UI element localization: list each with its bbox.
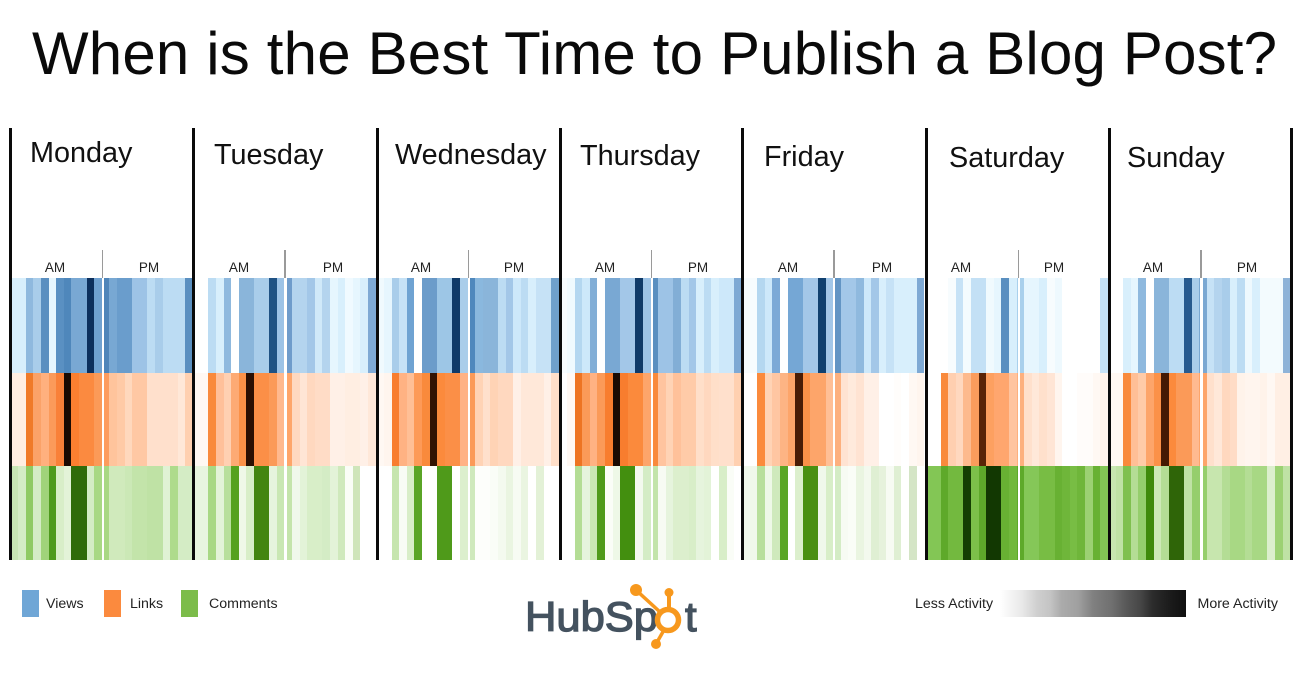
day label: Wednesday: Wednesday bbox=[395, 139, 547, 171]
PM label: PM bbox=[1044, 260, 1064, 275]
PM label: PM bbox=[1237, 260, 1257, 275]
Saturday comments band bbox=[928, 466, 1108, 560]
AM/PM divider bbox=[1018, 250, 1019, 278]
views label: Views bbox=[46, 596, 84, 612]
AM/PM divider bbox=[284, 250, 286, 278]
views swatch bbox=[22, 590, 39, 617]
AM/PM divider bbox=[468, 250, 469, 278]
Wednesday comments band bbox=[392, 466, 544, 560]
logo: HubSpot: HubSp bbox=[525, 593, 658, 640]
panel: Thursday bbox=[567, 140, 741, 560]
Monday links band bbox=[12, 373, 192, 466]
AM/PM divider bbox=[833, 250, 835, 278]
legend: activity scale bbox=[915, 590, 1278, 617]
Tuesday links band bbox=[195, 373, 376, 466]
logo: HubSpot: t bbox=[685, 593, 697, 640]
AM label: AM bbox=[229, 260, 249, 275]
panel: Sunday bbox=[1111, 142, 1290, 560]
Sunday links band bbox=[1111, 373, 1290, 466]
Monday views band bbox=[12, 278, 192, 373]
Sunday views band bbox=[1123, 278, 1290, 373]
AM label: AM bbox=[595, 260, 615, 275]
AM label: AM bbox=[951, 260, 971, 275]
title: When is the Best Time to Publish a Blog Post? bbox=[32, 20, 1277, 87]
comments swatch bbox=[181, 590, 198, 617]
day label: Sunday: Sunday bbox=[1127, 142, 1225, 174]
PM label: PM bbox=[504, 260, 524, 275]
Wednesday links band bbox=[379, 373, 559, 466]
Thursday links band bbox=[567, 373, 741, 466]
less activity label: Less Activity bbox=[915, 596, 993, 612]
Sunday comments band bbox=[1111, 466, 1290, 560]
Thursday comments band bbox=[575, 466, 727, 560]
AM/PM divider bbox=[651, 250, 652, 278]
day label: Monday: Monday bbox=[30, 137, 132, 169]
Wednesday views band bbox=[379, 278, 559, 373]
PM label: PM bbox=[139, 260, 159, 275]
Saturday links band bbox=[941, 373, 1108, 466]
Thursday views band bbox=[567, 278, 741, 373]
day label: Friday: Friday bbox=[764, 141, 844, 173]
PM label: PM bbox=[688, 260, 708, 275]
Tuesday comments band bbox=[195, 466, 360, 560]
links swatch bbox=[104, 590, 121, 617]
AM/PM divider bbox=[1200, 250, 1202, 278]
AM label: AM bbox=[778, 260, 798, 275]
legend: data types bbox=[22, 590, 278, 617]
Tuesday views band bbox=[208, 278, 376, 373]
panel: Saturday bbox=[928, 142, 1108, 560]
panel: Wednesday bbox=[379, 139, 559, 560]
Monday comments band bbox=[12, 466, 192, 560]
AM label: AM bbox=[45, 260, 65, 275]
PM label: PM bbox=[323, 260, 343, 275]
PM label: PM bbox=[872, 260, 892, 275]
AM/PM divider bbox=[102, 250, 103, 278]
day label: Thursday: Thursday bbox=[580, 140, 700, 172]
AM label: AM bbox=[1143, 260, 1163, 275]
Saturday views band bbox=[956, 278, 1108, 373]
Friday links band bbox=[757, 373, 924, 466]
Friday comments band bbox=[744, 466, 917, 560]
Friday views band bbox=[757, 278, 924, 373]
comments label: Comments bbox=[209, 596, 278, 612]
activity gradient bar bbox=[1000, 590, 1186, 617]
more activity label: More Activity bbox=[1198, 596, 1278, 612]
panel: Friday bbox=[744, 141, 924, 560]
AM label: AM bbox=[411, 260, 431, 275]
links label: Links bbox=[130, 596, 163, 612]
logo: HubSpot bbox=[525, 584, 697, 649]
panel: Monday bbox=[12, 137, 192, 560]
panel: Tuesday bbox=[195, 139, 376, 560]
day label: Tuesday: Tuesday bbox=[214, 139, 323, 171]
day label: Saturday: Saturday bbox=[949, 142, 1064, 174]
